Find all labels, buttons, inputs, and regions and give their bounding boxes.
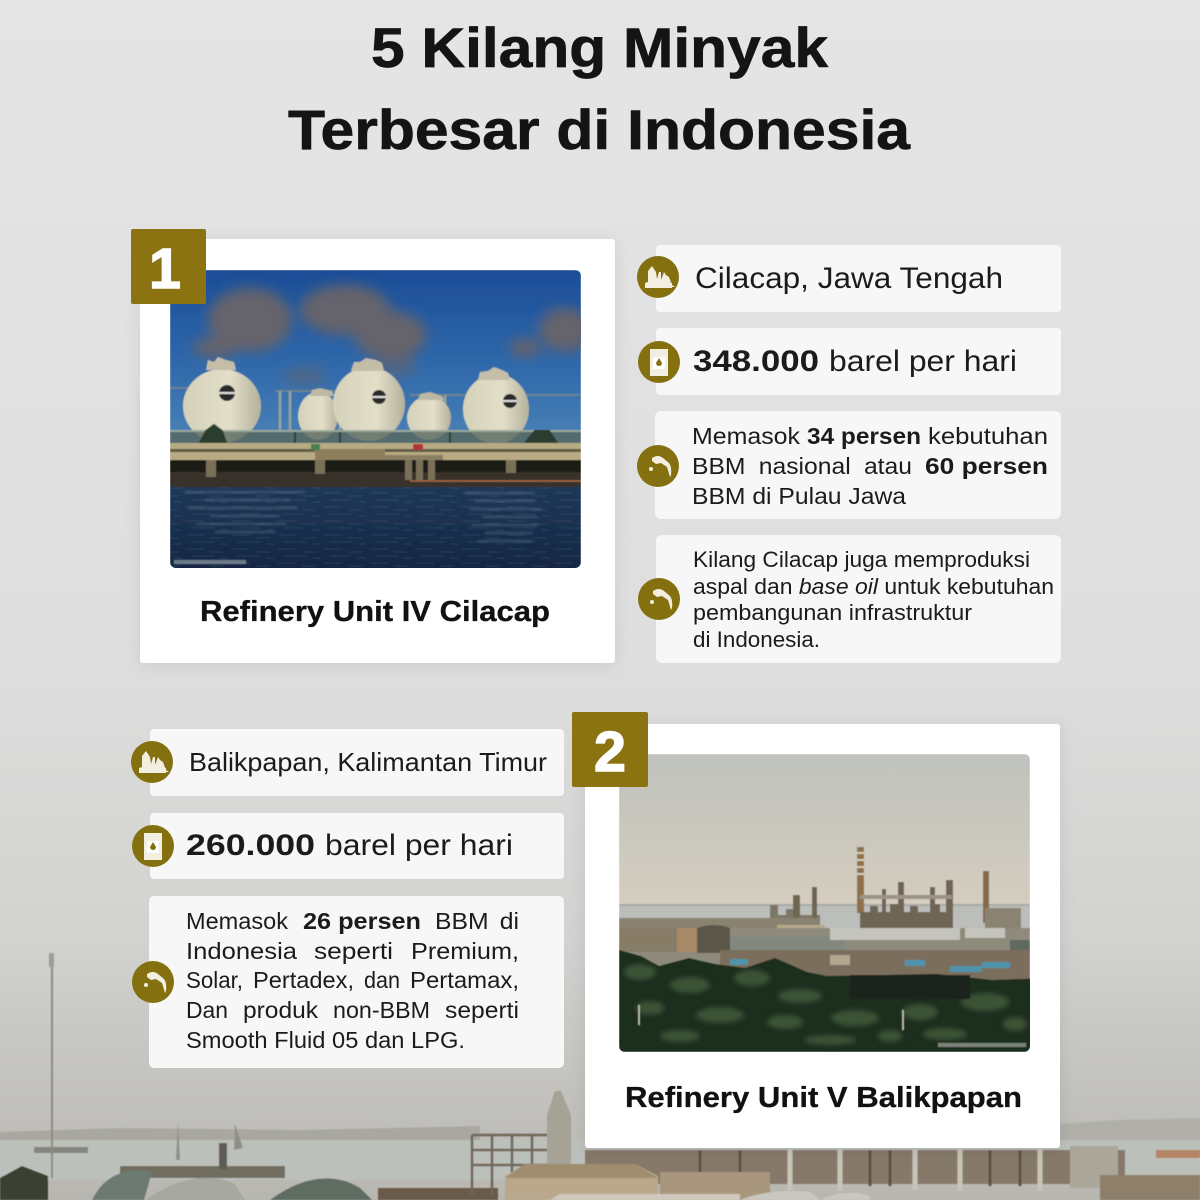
panel: supply Balikpapan: produk	[243, 997, 319, 1023]
panel: supply Balikpapan: 26 persen	[303, 908, 421, 934]
panel: supply Balikpapan: Solar,	[186, 967, 243, 993]
panel: capacity Balikpapan: barel per hari	[325, 829, 513, 862]
title: 5 Kilang Minyak	[371, 16, 829, 79]
icon: refinery	[637, 256, 679, 298]
panel: capacity Balikpapan	[132, 813, 564, 879]
panel: supply Balikpapan: dan	[364, 967, 400, 993]
title: Terbesar di Indonesia	[288, 98, 911, 161]
panel: products Cilacap: aspal dan base oil untuk kebutuhan	[693, 574, 1054, 599]
panel: supply Balikpapan: Pertamax,	[410, 967, 519, 993]
panel: supply Balikpapan: Memasok	[186, 908, 289, 934]
refinery 2 name: Refinery Unit V Balikpapan	[625, 1082, 1022, 1114]
panel: supply Cilacap: Memasok	[692, 423, 801, 449]
panel: supply Cilacap: BBM di Pulau Jawa	[692, 483, 906, 509]
panel: products Cilacap	[638, 535, 1061, 663]
panel: supply Balikpapan: seperti	[314, 938, 393, 964]
panel: supply Balikpapan	[132, 896, 564, 1068]
panel: supply Cilacap: BBM nasional atau	[692, 453, 912, 479]
photo: Balikpapan refinery	[619, 754, 1050, 1052]
photo: Cilacap spherical tanks	[170, 270, 591, 569]
panel: supply Balikpapan: Premium,	[411, 938, 519, 964]
icon: oil barrel	[132, 825, 174, 867]
panel: refinery 1 card	[140, 239, 615, 663]
icon: fuel nozzle	[637, 445, 679, 487]
panel: supply Cilacap	[637, 411, 1061, 519]
panel: supply Cilacap: 34 persen	[807, 423, 921, 449]
panel: location Cilacap: Cilacap, Jawa Tengah	[695, 262, 1003, 295]
panel: supply Balikpapan: Pertadex,	[253, 967, 354, 993]
panel: capacity Cilacap	[638, 328, 1061, 395]
icon: fuel nozzle	[638, 578, 680, 620]
icon: refinery	[131, 741, 173, 783]
panel: capacity Balikpapan: 260.000	[186, 829, 315, 862]
number badge 1	[131, 229, 206, 304]
panel: refinery 2 card	[585, 724, 1060, 1148]
panel: supply Balikpapan: seperti	[445, 997, 519, 1023]
panel: supply Cilacap: 60 persen	[925, 453, 1048, 479]
title	[288, 16, 911, 161]
panel: supply Balikpapan: Smooth Fluid 05 dan LPG.	[186, 1027, 465, 1053]
panel: supply Balikpapan: Indonesia	[186, 938, 297, 964]
panel: location Balikpapan: Balikpapan, Kalimantan Timur	[189, 747, 547, 777]
panel: supply Balikpapan: non-BBM	[333, 997, 430, 1023]
panel: supply Balikpapan: Dan	[186, 997, 228, 1023]
panel: supply Cilacap: kebutuhan	[928, 423, 1048, 449]
icon: oil barrel	[638, 341, 680, 383]
panel: capacity Cilacap: 348.000	[693, 345, 819, 378]
number badge 2	[572, 712, 648, 787]
panel: products Cilacap: Kilang Cilacap juga memproduksi	[693, 547, 1030, 572]
icon: fuel nozzle	[132, 961, 174, 1003]
number badge 2: 2	[594, 720, 626, 784]
panel: location Cilacap	[637, 245, 1061, 312]
refinery 1 name: Refinery Unit IV Cilacap	[200, 596, 550, 628]
panel: location Balikpapan	[131, 729, 564, 796]
panel: products Cilacap: di Indonesia.	[693, 627, 820, 652]
panel: capacity Cilacap: barel per hari	[829, 345, 1017, 378]
number badge 1: 1	[149, 237, 181, 301]
panel: products Cilacap: pembangunan infrastruktur	[693, 600, 972, 625]
panel: supply Balikpapan: BBM di	[435, 908, 519, 934]
